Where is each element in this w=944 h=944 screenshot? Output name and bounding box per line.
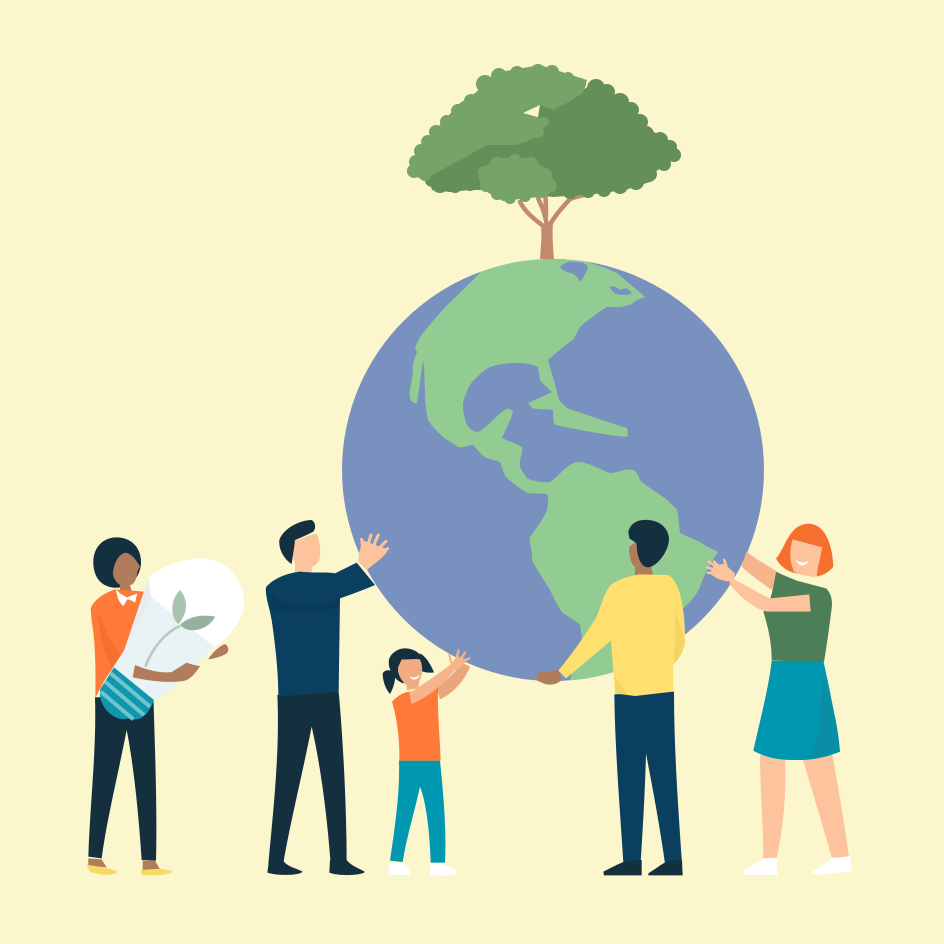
face and neck xyxy=(113,553,140,597)
bulb base ridges xyxy=(101,673,150,719)
pants xyxy=(390,761,445,863)
collar xyxy=(116,589,137,606)
far arm xyxy=(437,663,470,699)
pants xyxy=(614,692,682,863)
smile xyxy=(410,674,420,680)
legs xyxy=(760,752,849,858)
person: woman holding light bulb xyxy=(86,537,244,875)
hands xyxy=(449,651,469,671)
tree canopy front xyxy=(478,154,557,204)
gulf of st lawrence xyxy=(610,286,632,295)
continents xyxy=(410,250,718,680)
hand xyxy=(536,670,562,685)
shirt xyxy=(392,687,441,761)
ankles xyxy=(88,858,160,870)
bulb glass xyxy=(124,558,244,698)
hair xyxy=(93,537,141,588)
ocean xyxy=(342,259,764,681)
shoes xyxy=(603,860,683,875)
shoes xyxy=(86,864,173,875)
tree trunk and branches xyxy=(520,192,590,259)
person: girl xyxy=(383,648,470,875)
neck and ear xyxy=(629,542,653,577)
person: woman with red hair xyxy=(707,524,852,875)
top xyxy=(763,572,832,662)
person: man in navy sweater xyxy=(266,520,388,875)
hudson bay xyxy=(560,262,588,282)
neck xyxy=(295,560,312,575)
sweater xyxy=(91,589,144,697)
forearm and hands xyxy=(133,663,200,682)
americas land xyxy=(410,250,718,680)
hair xyxy=(279,520,315,564)
hand xyxy=(707,560,735,582)
near arm xyxy=(729,578,811,612)
bulb shade xyxy=(124,578,152,650)
near arm xyxy=(409,665,455,704)
plant leaf left xyxy=(172,590,186,624)
globe xyxy=(342,250,764,681)
skirt xyxy=(753,661,840,760)
pants xyxy=(268,692,347,864)
sweater shading xyxy=(615,610,685,695)
pigtail right xyxy=(418,653,434,672)
hair xyxy=(389,648,434,683)
far arm xyxy=(742,552,780,590)
bulb lower glass xyxy=(112,597,214,701)
shoes xyxy=(388,863,458,875)
plant stem xyxy=(145,626,180,667)
hand xyxy=(358,535,388,570)
person: man in yellow sweater xyxy=(536,520,685,875)
shoes xyxy=(267,860,365,875)
hair xyxy=(628,520,669,567)
pants xyxy=(88,695,156,861)
face xyxy=(292,534,320,569)
hair xyxy=(776,524,833,577)
tree canopy dark xyxy=(425,79,681,199)
skirt shading xyxy=(810,673,840,759)
shoes xyxy=(742,856,852,875)
tree xyxy=(407,64,681,259)
smile xyxy=(796,560,808,565)
sweater shading xyxy=(98,610,132,670)
pigtail left xyxy=(383,670,395,694)
bulb base xyxy=(100,667,154,719)
sweater xyxy=(266,563,375,697)
sweater shading xyxy=(272,593,340,611)
tree canopy light xyxy=(407,64,587,181)
illustration: people holding the earth xyxy=(86,64,852,876)
face xyxy=(790,539,822,577)
light bulb xyxy=(100,558,244,719)
face xyxy=(398,659,422,690)
far hand xyxy=(208,644,228,659)
plant leaf right xyxy=(180,616,215,630)
sweater xyxy=(558,574,685,696)
